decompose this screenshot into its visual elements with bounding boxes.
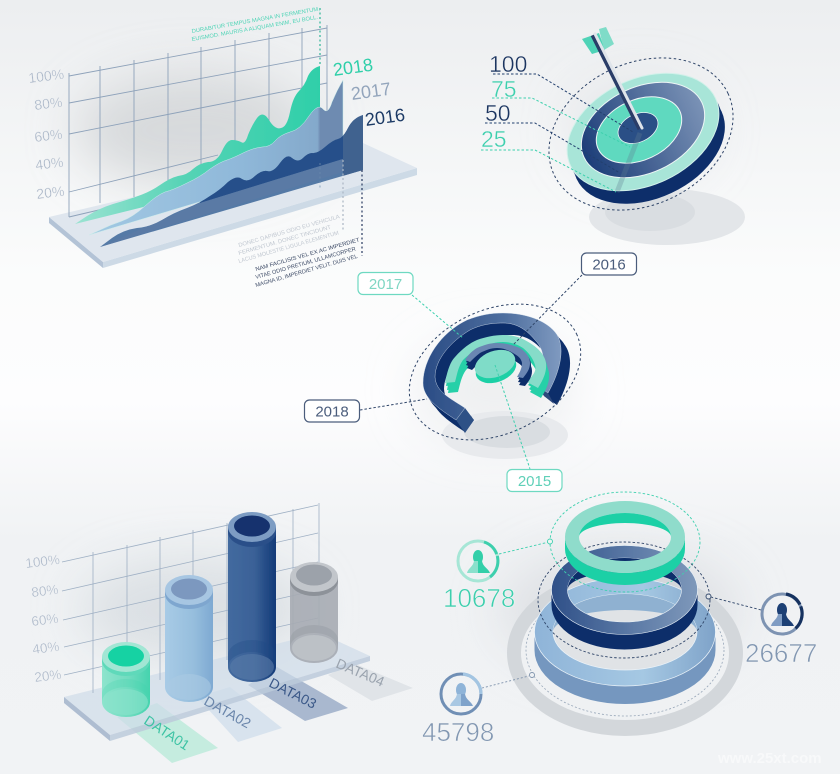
connector 26677	[706, 594, 761, 610]
panel: cylinder chart	[25, 503, 413, 763]
series labels	[332, 55, 406, 130]
base ellipses	[507, 570, 743, 736]
axis labels	[25, 552, 62, 685]
note: grey	[238, 214, 341, 265]
label 2017: 2017	[369, 276, 402, 293]
arc mint	[445, 335, 549, 398]
axis labels	[27, 66, 65, 202]
data labels: DATA04	[334, 655, 387, 690]
dotted leader lines	[320, 8, 362, 256]
label 2017	[358, 272, 413, 294]
cylinder: DATA03	[228, 512, 276, 682]
label 2015	[507, 470, 562, 492]
icon: user 45798	[441, 674, 481, 714]
icon: user 10678	[458, 541, 498, 581]
panel: concentric arcs	[304, 253, 636, 492]
cylinder: DATA04	[290, 562, 338, 663]
arrow shadow	[617, 133, 640, 192]
panel: target	[481, 27, 758, 245]
cylinder: DATA01	[102, 642, 150, 717]
axis labels: 60%	[33, 126, 63, 145]
arc outer	[423, 313, 570, 433]
axis labels: 80%	[31, 582, 59, 600]
score labels: 50	[485, 100, 511, 126]
connectors	[360, 275, 582, 469]
note: dark: NAM FACILISIS VEL EX AC IMPERDIET	[255, 237, 361, 273]
panel: area chart	[27, 6, 417, 289]
dashed orbit	[524, 29, 758, 239]
soft background shadows	[75, 72, 740, 670]
light blue ring	[534, 578, 716, 704]
series 2017	[89, 80, 343, 235]
mint ring	[565, 501, 685, 585]
note: dark: MAGNA ID, IMPERDIET VELIT. DUIS VEL	[255, 254, 358, 289]
value 10678: 10678	[443, 583, 515, 613]
data labels: DATA01	[141, 712, 193, 753]
navy ring	[552, 546, 698, 650]
series 2018	[75, 66, 320, 224]
connector 45798	[482, 672, 534, 688]
watermark: www.25xt.com	[717, 750, 822, 767]
arrow	[582, 27, 642, 129]
data tags	[117, 663, 413, 763]
series labels: 2016	[364, 105, 406, 130]
data labels: DATA03	[267, 674, 319, 712]
note: mint: EUISMOD. MAURIS A ALIQUAM ENIM, EU BOLL.	[191, 15, 319, 43]
dashed orbit	[387, 278, 603, 466]
label 2016: 2016	[592, 256, 626, 274]
score labels: 75	[491, 76, 517, 102]
note: grey: FERMENTUM. DONEC TINCIDUNT	[238, 225, 332, 257]
note: grey: DONEC DAPIBUS ODIO EU VEHICULA	[238, 214, 341, 249]
value 45798: 45798	[422, 717, 494, 747]
axis labels: 40%	[32, 639, 60, 657]
label 2015: 2015	[518, 473, 551, 490]
note: grey: LACUS MOLESTIE LIGULA ELEMENTUM	[238, 230, 340, 265]
grid	[69, 25, 327, 217]
axis labels: 60%	[31, 611, 59, 629]
data labels: DATA02	[202, 693, 254, 731]
axis labels: 20%	[35, 183, 65, 202]
note: dark: VITAE ODIO PRETIUM, ULLAMCORPER	[255, 246, 357, 281]
note: dark	[255, 237, 361, 289]
axis labels: 80%	[33, 94, 63, 113]
panel: stacked rings	[422, 492, 817, 747]
centre disc	[471, 345, 520, 388]
axis labels: 100%	[27, 66, 65, 86]
data labels	[141, 655, 387, 753]
axis labels: 100%	[25, 552, 61, 571]
score leader lines	[481, 74, 633, 192]
axis labels: 20%	[34, 667, 62, 685]
platform	[64, 633, 370, 741]
score labels	[481, 51, 527, 152]
score labels: 25	[481, 126, 507, 152]
connector 10678	[499, 539, 552, 554]
dashed orbits	[538, 492, 710, 658]
label 2018: 2018	[315, 404, 349, 420]
arc inner	[465, 343, 532, 386]
icon: user 26677	[762, 594, 802, 634]
label 2018	[304, 400, 360, 422]
series labels: 2017	[350, 79, 392, 104]
grid	[62, 503, 319, 693]
value 26677: 26677	[745, 638, 817, 668]
arcs shadow	[442, 411, 568, 459]
target shadow	[589, 189, 745, 245]
series labels: 2018	[332, 55, 374, 80]
axis labels: 40%	[34, 154, 64, 173]
label 2016	[582, 253, 636, 275]
platform slab	[49, 143, 417, 268]
cylinder: DATA02	[165, 575, 213, 702]
score labels: 100	[489, 51, 527, 77]
series 2016	[100, 115, 363, 247]
note: mint: DURABITUR TEMPUS MAGNA IN FERMENTUM,	[191, 6, 321, 35]
target disc	[548, 50, 744, 227]
